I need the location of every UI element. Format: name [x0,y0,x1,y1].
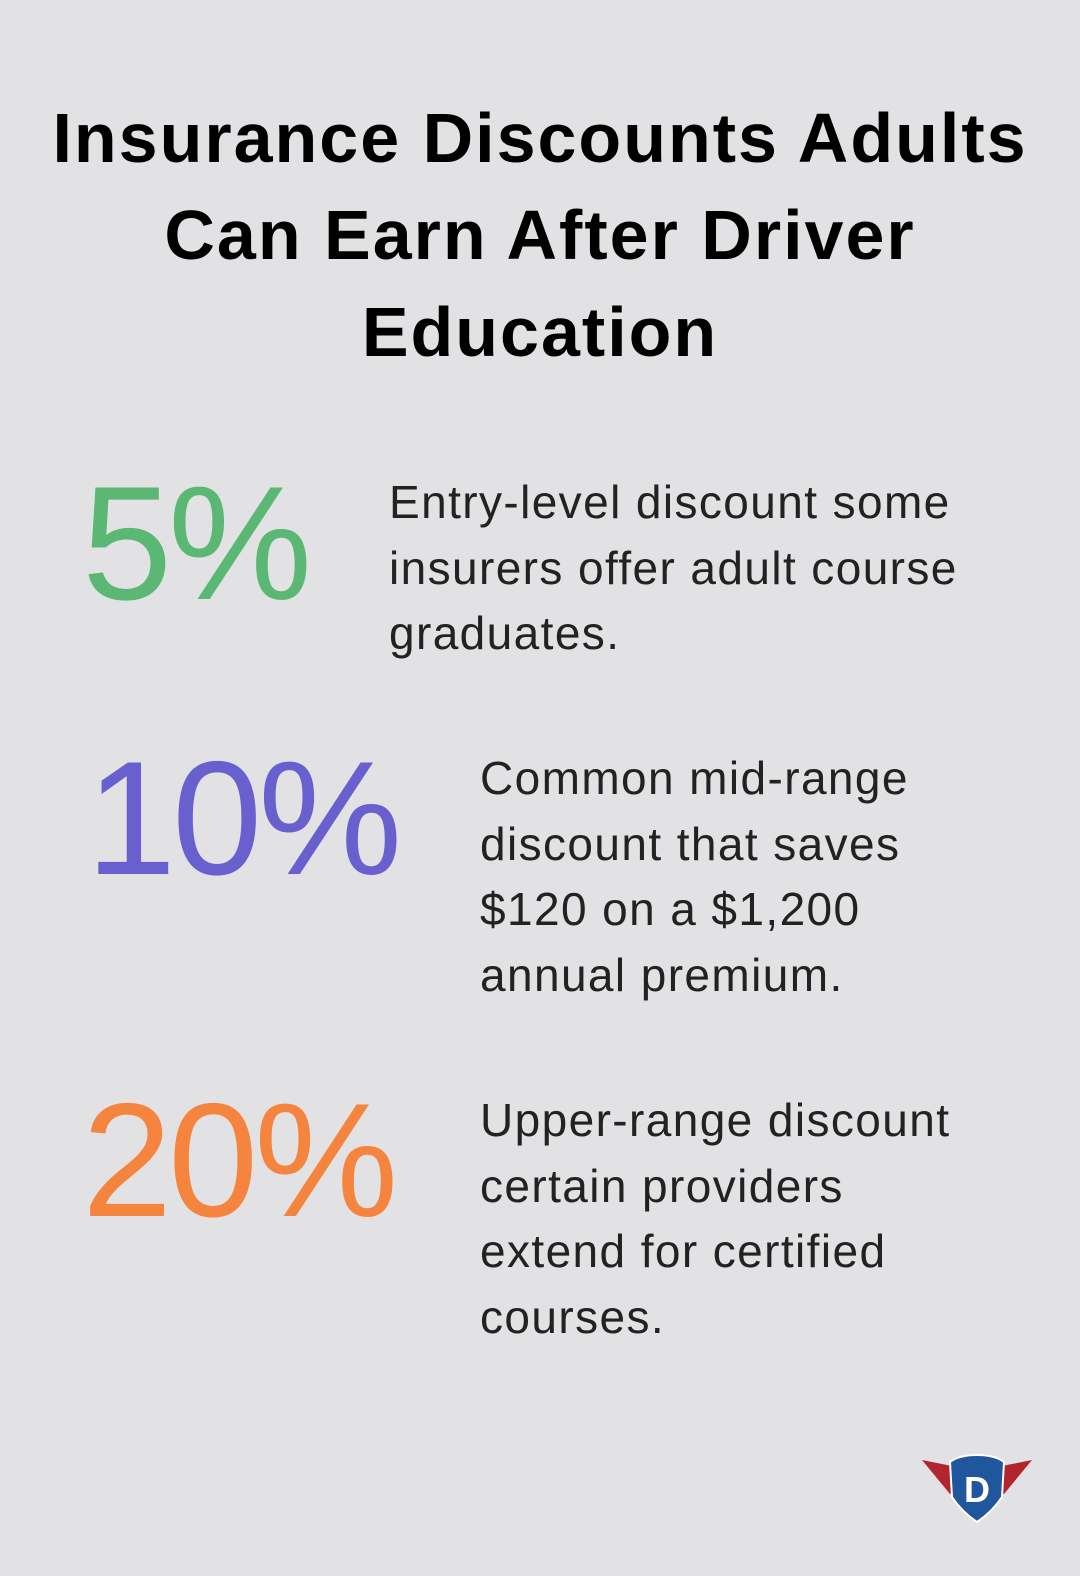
icon: logo shield with wings: D [964,1469,990,1510]
text: 10% description: $120 on a $1,200 [480,883,861,935]
icon: logo shield with wings [922,1454,1032,1523]
title: Insurance Discounts Adults [52,99,1028,177]
text: 10% description [480,752,909,1000]
stat: 10%: 10% [86,728,398,909]
text: 10% description: annual premium. [480,948,844,1000]
text: 5% description: insurers offer adult course [389,542,958,594]
title [52,99,1028,371]
text: 20% description [480,1094,950,1342]
text: 10% description: discount that saves [480,818,900,870]
text: 5% description [389,476,958,659]
text: 20% description: courses. [480,1290,665,1342]
title: Can Earn After Driver [164,196,916,274]
stat: 5%: 5% [82,453,308,634]
text: 10% description: Common mid-range [480,752,909,804]
stat: 20%: 20% [82,1070,394,1251]
text: 20% description: certain providers [480,1160,844,1212]
text: 5% description: Entry-level discount some [389,476,951,528]
text: 20% description: extend for certified [480,1225,886,1277]
text: 5% description: graduates. [389,607,620,659]
title: Education [362,293,718,371]
text: 20% description: Upper-range discount [480,1094,950,1146]
